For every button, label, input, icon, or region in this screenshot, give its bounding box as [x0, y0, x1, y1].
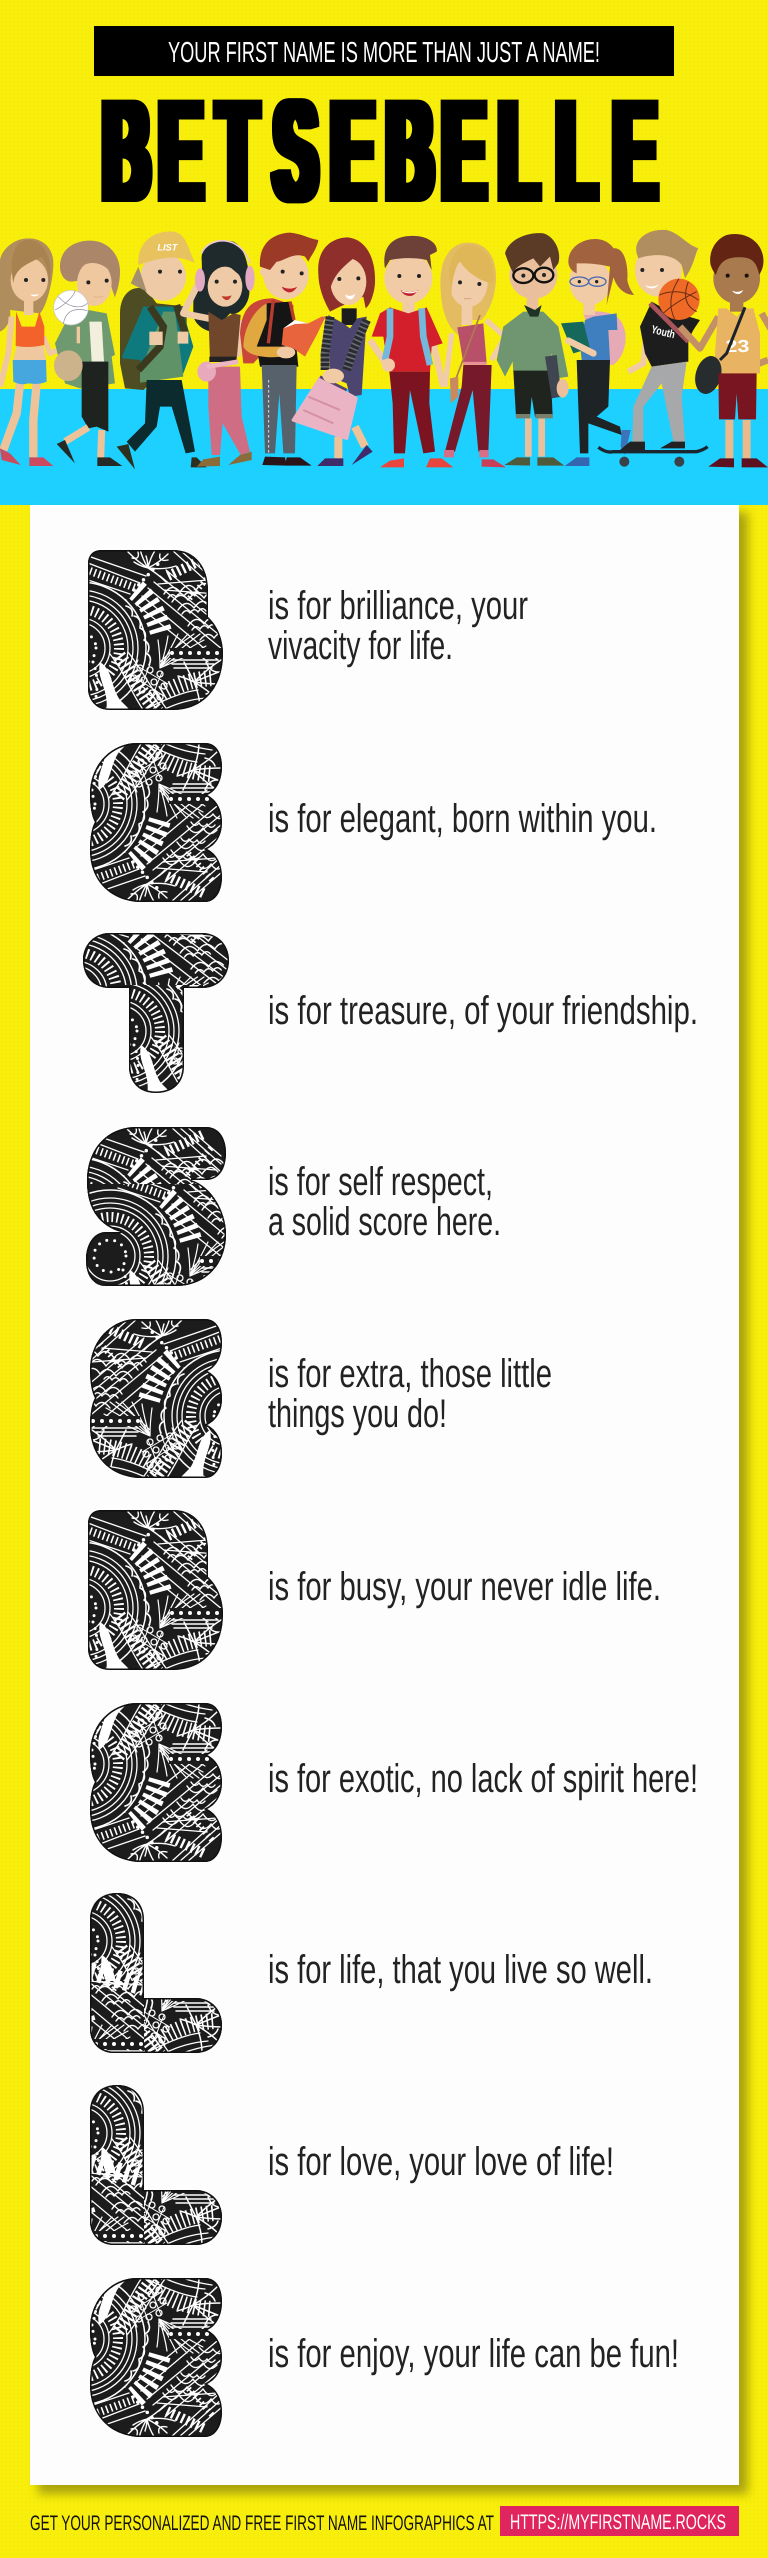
row 1 text [268, 584, 528, 668]
row 1 text: vivacity for life. [268, 624, 453, 668]
row 4 text: a solid score here. [268, 1200, 501, 1244]
footer url badge [500, 2506, 739, 2536]
person 12 [691, 234, 768, 467]
person 2 [54, 241, 122, 466]
person 4 [183, 241, 255, 467]
person 3 [117, 231, 207, 469]
person 9 [497, 233, 569, 466]
row 9 text: is for love, your love of life! [268, 2140, 614, 2184]
row 7: letter E [90, 1703, 222, 1862]
footer call to action: GET YOUR PERSONALIZED AND FREE FIRST NAME INFOGRAPHICS AT [30, 2512, 494, 2535]
row 1 text: is for brilliance, your [268, 584, 528, 628]
row 10: letter E [90, 2278, 222, 2437]
person 5 [240, 233, 326, 466]
person 3: LIST [157, 242, 178, 253]
row 6: letter B [88, 1510, 223, 1670]
row 4 text [268, 1160, 501, 1244]
person 11: Youth [650, 323, 676, 341]
row 8: letter L [90, 1893, 222, 2053]
person 11 [598, 230, 718, 467]
person 6 [293, 237, 375, 466]
panel shadow [38, 512, 748, 2494]
row 4 text: is for self respect, [268, 1160, 493, 1204]
title: BETSEBELLE [103, 72, 656, 231]
people left group [0, 231, 375, 469]
row 5 text: things you do! [268, 1392, 447, 1436]
row 1: letter B [88, 550, 223, 710]
white panel [30, 505, 739, 2485]
row 2: letter E [90, 743, 222, 902]
person 10 [561, 239, 634, 466]
person 12: 23 [725, 337, 749, 356]
person 7 [370, 236, 453, 467]
row 5 text [268, 1352, 552, 1436]
people illustration [0, 230, 768, 469]
row 3: letter T [83, 933, 229, 1093]
row 9: letter L [90, 2085, 222, 2245]
row 5 text: is for extra, those little [268, 1352, 552, 1396]
people right group [370, 230, 768, 467]
floor band [0, 389, 768, 505]
person 1 [0, 238, 78, 466]
row 4: letter S [86, 1127, 226, 1286]
row 5: letter E [90, 1319, 222, 1478]
person 8 [440, 243, 506, 467]
top banner [94, 26, 674, 76]
